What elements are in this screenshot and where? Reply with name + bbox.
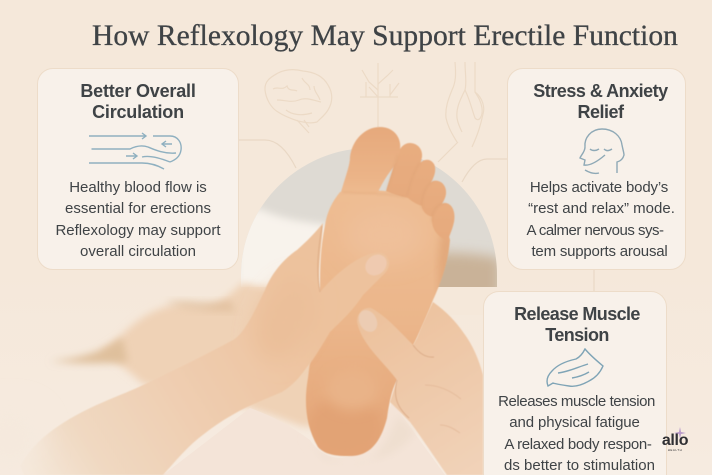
- foot: [306, 127, 455, 456]
- heading: stress and anxiety relief: Stress & Anxiety: [533, 81, 668, 101]
- toe: second: [386, 143, 422, 198]
- text: circulation body: [55, 179, 221, 260]
- text: muscle body: and physical fatigue: [509, 414, 640, 431]
- heading: release muscle tension: Release Muscle: [514, 304, 640, 324]
- text: circulation body: overall circulation: [80, 243, 196, 260]
- text: circulation body: Reflexology may support: [55, 222, 221, 238]
- text: stress body: [526, 179, 675, 260]
- logo: allo health: [662, 428, 688, 452]
- icon: muscle leaf: [546, 348, 604, 387]
- thumb crease lines: [318, 226, 322, 292]
- thumb nail: [355, 307, 381, 335]
- hand shading: [244, 271, 326, 369]
- icon: nerve tree outline: [360, 63, 399, 127]
- panel: better overall circulation: [37, 68, 239, 270]
- panel: stress and anxiety relief: “rest and relax” mode.: [528, 200, 675, 217]
- text: muscle body: Releases muscle tension: [498, 393, 655, 410]
- heading: stress and anxiety relief: [533, 81, 668, 122]
- heading: better overall circulation: [80, 81, 196, 122]
- icon: blood flow arrows: [89, 132, 182, 170]
- finger creases: [395, 345, 434, 418]
- text: muscle body: A relaxed body respon-: [504, 436, 652, 452]
- heading: better overall circulation: Circulation: [92, 102, 184, 122]
- panel: stress and anxiety relief: tem supports arousal: [531, 243, 668, 260]
- left hand and forearm: [20, 223, 391, 475]
- toe: little: [432, 203, 455, 241]
- foot sole: [306, 190, 450, 456]
- sheet shadow: [300, 415, 415, 463]
- text: muscle body: ds better to stimulation: [504, 457, 655, 474]
- bed sheet: [163, 402, 445, 475]
- toe: third: [407, 160, 435, 206]
- heading: stress and anxiety relief: Relief: [577, 102, 624, 122]
- icon: vein outline: [438, 62, 484, 162]
- logo: allo health: allo: [662, 432, 688, 449]
- panel: release muscle tension: [483, 291, 667, 475]
- connector lines: [239, 140, 594, 291]
- toe: fourth: [422, 181, 446, 217]
- illustration: foot reflexology photo scene: [44, 62, 594, 475]
- title: How Reflexology May Support Erectile Function: [92, 20, 678, 52]
- toe creases: [342, 155, 445, 222]
- photo backdrop arch: [241, 150, 497, 287]
- forearm fade: [0, 410, 40, 470]
- thumb nail: [361, 250, 391, 280]
- panel: stress and anxiety relief: Helps activate body’s: [530, 179, 668, 196]
- icon: calm face: [579, 128, 625, 174]
- logo: allo health: HEALTH: [668, 448, 682, 452]
- text: circulation body: Healthy blood flow is: [69, 179, 207, 196]
- heading: release muscle tension: [514, 304, 640, 345]
- toe: big: [341, 127, 400, 194]
- sole shading: [336, 224, 450, 402]
- text: circulation body: essential for erections: [65, 200, 211, 217]
- blurred leg behind hands: [50, 283, 340, 430]
- heading: release muscle tension: Tension: [545, 325, 609, 345]
- panel: stress and anxiety relief: [507, 68, 686, 270]
- icon: brain outline: [265, 70, 332, 133]
- heading: better overall circulation: Better Overall: [80, 81, 196, 101]
- panel: stress and anxiety relief: A calmer nervous sys-: [526, 222, 664, 238]
- text: muscle body: [498, 393, 655, 474]
- lower right hand: [355, 302, 483, 475]
